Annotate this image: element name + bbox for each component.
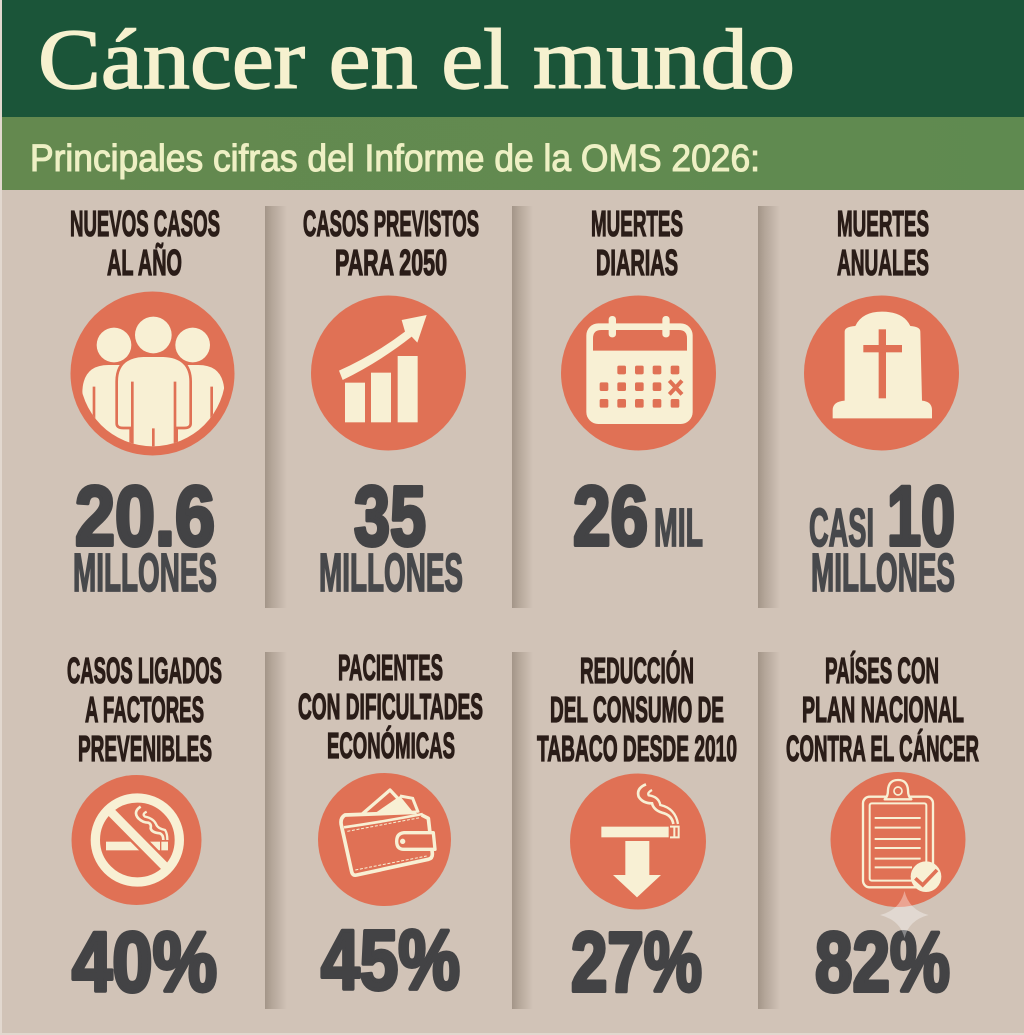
- icon: no smoking: [72, 775, 202, 905]
- figure: 20.6 millones: MILLONES: [73, 543, 217, 603]
- figure: 45%: 45%: [321, 913, 460, 1007]
- panel: casos ligados a factores prevenibles: [67, 650, 222, 1009]
- figure: casi 10 millones: 10: [887, 469, 955, 563]
- heading: muertes diarias: DIARIAS: [596, 242, 678, 283]
- icon: cigarette with down arrow: [570, 774, 706, 910]
- panel: muertes diarias: [561, 203, 716, 563]
- heading: reducción: [537, 649, 737, 769]
- icon: wallet: [318, 773, 451, 906]
- figure: casi 10 millones: [809, 469, 955, 603]
- heading: reducción: DEL CONSUMO DE: [550, 689, 724, 730]
- decorative sparkle: [880, 891, 928, 938]
- subtitle: Principales cifras del Informe de la OMS 2026:: [30, 138, 760, 180]
- subtitle band: [2, 117, 1024, 190]
- heading: pacientes: PACIENTES: [338, 647, 443, 688]
- panel: nuevos casos al año: [70, 203, 234, 603]
- figure: 20.6 millones: [73, 469, 217, 603]
- figure: 26 mil: 26: [573, 469, 648, 563]
- heading: reducción: TABACO DESDE 2010: [537, 728, 737, 769]
- heading: muertes anuales: [837, 203, 929, 283]
- heading: reducción: REDUCCIÓN: [580, 649, 694, 691]
- panel: reducción del consumo de tabaco: [537, 649, 737, 1009]
- heading: muertes anuales: MUERTES: [837, 203, 929, 244]
- heading: casos previstos: [303, 203, 479, 283]
- icon: group of people: [70, 292, 234, 456]
- heading: pacientes: ECONÓMICAS: [327, 724, 455, 766]
- figure: 40%: 40%: [72, 915, 217, 1009]
- panel: muertes anuales: [804, 203, 959, 603]
- figure: 27%: 27%: [571, 915, 702, 1009]
- panel: países con plan nacional: [786, 650, 979, 1009]
- heading: casos previstos: CASOS PREVISTOS: [303, 203, 479, 244]
- heading: pacientes: [298, 647, 483, 766]
- header band: [2, 0, 1024, 117]
- panel: pacientes con dificultades económicas: [298, 647, 483, 1007]
- icon: calendar: [561, 296, 716, 450]
- heading: muertes anuales: ANUALES: [837, 242, 929, 283]
- figure: casi 10 millones: CASI: [809, 498, 874, 558]
- heading: pacientes: CON DIFICULTADES: [298, 686, 483, 727]
- heading: casos previstos: PARA 2050: [335, 242, 447, 283]
- heading: casos ligados: A FACTORES: [85, 689, 204, 730]
- heading: nuevos casos: [70, 203, 220, 283]
- heading: casos ligados: CASOS LIGADOS: [67, 650, 222, 691]
- heading: nuevos casos: NUEVOS CASOS: [70, 203, 220, 244]
- figure: 82%: 82%: [815, 915, 950, 1009]
- title: Cáncer en el mundo: [38, 11, 795, 107]
- icon: gravestone: [804, 296, 959, 450]
- heading: muertes diarias: MUERTES: [591, 203, 683, 244]
- heading: nuevos casos: AL AÑO: [107, 241, 182, 283]
- heading: muertes diarias: [591, 203, 683, 283]
- panel: casos previstos para 2050: [303, 203, 479, 603]
- figure: 35 millones: 35: [354, 469, 426, 563]
- heading: casos ligados: [67, 650, 222, 769]
- figure: 35 millones: [319, 469, 463, 603]
- icon: rising bar chart: [311, 296, 466, 450]
- icon: clipboard with check: [830, 772, 966, 907]
- figure: 20.6 millones: 20.6: [75, 469, 215, 563]
- heading: casos ligados: PREVENIBLES: [78, 728, 212, 769]
- figure: 26 mil: MIL: [654, 498, 703, 558]
- heading: países con: [786, 650, 979, 769]
- figure: 35 millones: MILLONES: [319, 543, 463, 603]
